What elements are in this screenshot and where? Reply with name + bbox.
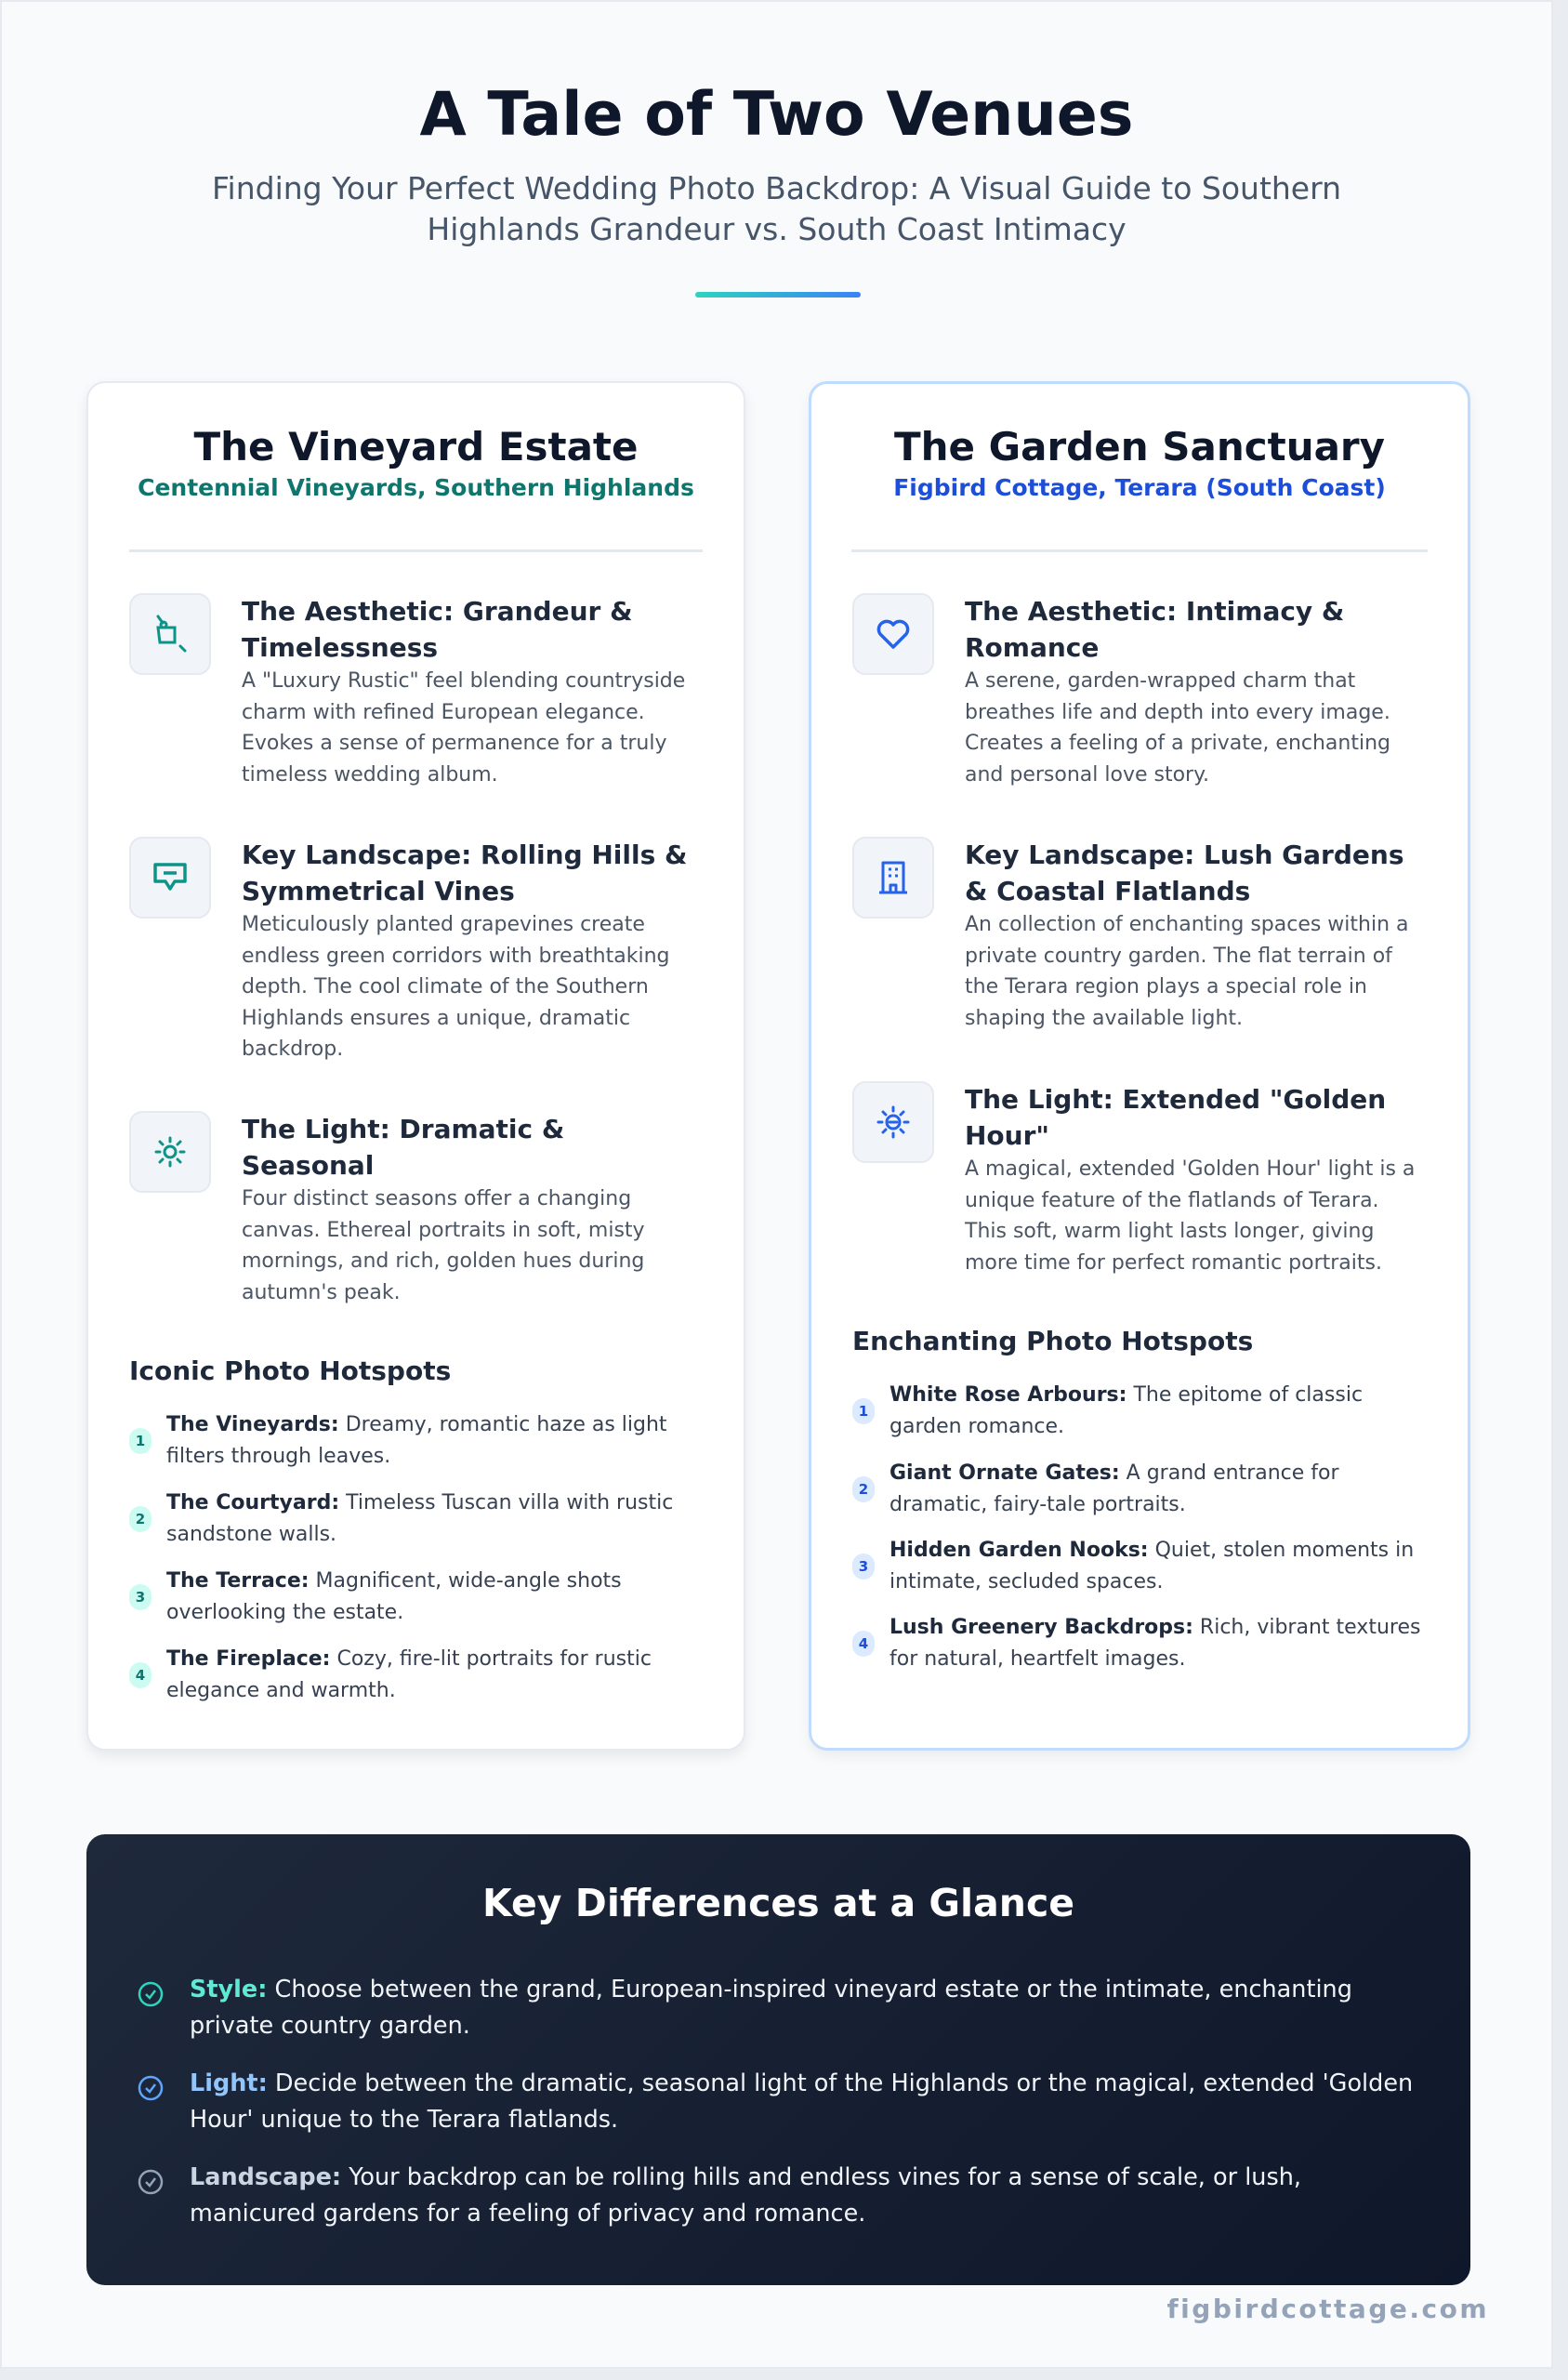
hotspot list bbox=[852, 1383, 1420, 1670]
item: aesthetic bbox=[852, 593, 1390, 787]
footer: website: figbirdcottage.com bbox=[1167, 2294, 1489, 2324]
hotspot list: Giant Ornate Gates: A grand entrance for dramatic, fairy-tale portraits. bbox=[889, 1461, 1339, 1515]
panel: key differences bbox=[86, 1834, 1470, 2285]
panel: vineyard estate: 4 bbox=[136, 1667, 145, 1684]
item: aesthetic: The Aesthetic: Grandeur & Timelessness bbox=[242, 596, 632, 663]
item: landscape: Meticulously planted grapevines create endless green corridors with breathtaking depth. The cool climate of the Southern Highlands ensures a unique, dramatic backdrop. bbox=[242, 913, 669, 1061]
icon: sun bbox=[852, 1081, 934, 1163]
item: landscape bbox=[852, 837, 1409, 1030]
item: landscape: Key Landscape: Lush Gardens & Coastal Flatlands bbox=[965, 840, 1403, 906]
hotspot list: 3 bbox=[859, 1558, 868, 1575]
difference: landscape: Landscape: Your backdrop can be rolling hills and endless vines for a sense of scale, or lush, manicured gardens for a feeling of privacy and romance. bbox=[190, 2163, 1301, 2228]
hotspots heading: Enchanting Photo Hotspots bbox=[852, 1326, 1253, 1356]
item: light bbox=[129, 1111, 645, 1303]
item: light: Four distinct seasons offer a changing canvas. Ethereal portraits in soft, misty mornings, and rich, golden hues during autumn's peak. bbox=[242, 1187, 645, 1303]
item: light: The Light: Extended "Golden Hour" bbox=[965, 1084, 1386, 1151]
difference: light: Light: Decide between the dramatic, seasonal light of the Highlands or the magical, extended 'Golden Hour' unique to the Terara flatlands. bbox=[190, 2069, 1413, 2134]
hotspot list: The Courtyard: Timeless Tuscan villa with rustic sandstone walls. bbox=[166, 1491, 673, 1545]
item: light bbox=[852, 1081, 1415, 1274]
hotspot list: 2 bbox=[859, 1481, 868, 1498]
heading: Key Differences at a Glance bbox=[482, 1881, 1074, 1925]
item: light: A magical, extended 'Golden Hour' light is a unique feature of the flatlands of Terara. This soft, warm light lasts longer, giving more time for perfect romantic portraits. bbox=[965, 1157, 1415, 1274]
hotspot list: The Vineyards: Dreamy, romantic haze as light filters through leaves. bbox=[166, 1413, 667, 1467]
subtitle: Finding Your Perfect Wedding Photo Backdrop: A Visual Guide to Southern Highlands Grandeur vs. South Coast Intimacy bbox=[212, 170, 1341, 247]
panel: garden sanctuary: Lush Greenery Backdrops: Rich, vibrant textures for natural, heartfelt images. bbox=[889, 1616, 1420, 1670]
item: aesthetic bbox=[129, 593, 685, 787]
hotspot list: The Terrace: Magnificent, wide-angle shots overlooking the estate. bbox=[166, 1569, 622, 1623]
hotspot list: White Rose Arbours: The epitome of classic garden romance. bbox=[889, 1383, 1363, 1437]
hotspot list: 1 bbox=[136, 1433, 145, 1449]
hotspot list: 2 bbox=[136, 1511, 145, 1527]
icon: heart bbox=[852, 593, 934, 675]
hotspots heading: Iconic Photo Hotspots bbox=[129, 1355, 451, 1386]
item: landscape: Key Landscape: Rolling Hills & Symmetrical Vines bbox=[242, 840, 687, 906]
card heading bbox=[138, 424, 694, 501]
card heading: Figbird Cottage, Terara (South Coast) bbox=[893, 474, 1386, 501]
icon: sun bbox=[129, 1111, 211, 1193]
card heading: Centennial Vineyards, Southern Highlands bbox=[138, 474, 694, 501]
card heading bbox=[893, 424, 1386, 501]
card heading: The Vineyard Estate bbox=[193, 424, 638, 469]
item: aesthetic: The Aesthetic: Intimacy & Romance bbox=[965, 596, 1344, 663]
icon: building bbox=[852, 837, 934, 919]
panel: garden sanctuary bbox=[809, 381, 1470, 1751]
item: aesthetic: A "Luxury Rustic" feel blending countryside charm with refined European elegance. Evokes a sense of permanence for a truly timeless wedding album. bbox=[242, 669, 685, 787]
difference: style: Style: Choose between the grand, European-inspired vineyard estate or the intimate, enchanting private country garden. bbox=[190, 1976, 1352, 2040]
icon: vine bbox=[129, 593, 211, 675]
hotspot list: Hidden Garden Nooks: Quiet, stolen moments in intimate, secluded spaces. bbox=[889, 1539, 1414, 1593]
panel: garden sanctuary: 4 bbox=[859, 1635, 868, 1652]
hotspot list bbox=[129, 1413, 673, 1701]
item: landscape bbox=[129, 837, 687, 1061]
panel: vineyard estate bbox=[86, 381, 745, 1751]
item: landscape: An collection of enchanting spaces within a private country garden. The flat terrain of the Terara region plays a special role in shaping the available light. bbox=[965, 913, 1409, 1030]
icon: hills bbox=[129, 837, 211, 919]
hotspot list: 1 bbox=[859, 1403, 868, 1420]
card heading: The Garden Sanctuary bbox=[894, 424, 1385, 469]
panel: vineyard estate: The Fireplace: Cozy, fire-lit portraits for rustic elegance and warmth. bbox=[166, 1647, 652, 1701]
hotspot list: 3 bbox=[136, 1589, 145, 1606]
item: aesthetic: A serene, garden-wrapped charm that breathes life and depth into every image. Creates a feeling of a private, enchanting and personal love story. bbox=[965, 669, 1390, 787]
accent bar bbox=[695, 292, 861, 298]
title: A Tale of Two Venues bbox=[419, 80, 1134, 150]
item: light: The Light: Dramatic & Seasonal bbox=[242, 1114, 564, 1181]
